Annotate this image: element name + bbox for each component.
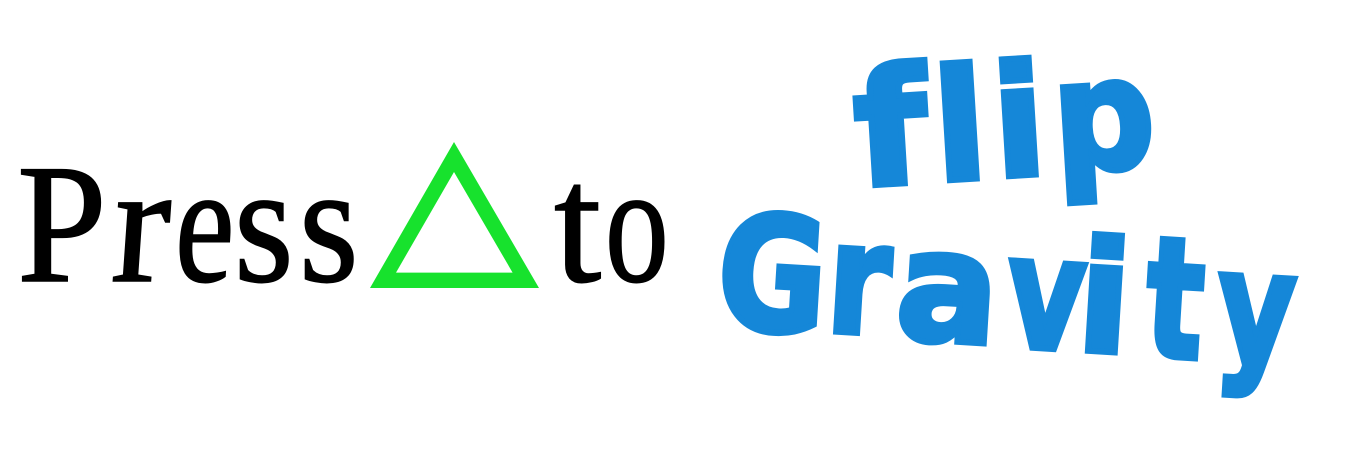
text: Press: P <box>17 129 107 318</box>
heading: Gravity: a <box>892 195 1004 381</box>
heading: Flip: f <box>849 33 935 224</box>
heading: Gravity: t <box>1141 202 1210 399</box>
heading: Gravity: G <box>713 181 832 372</box>
text: to: t <box>554 130 601 318</box>
heading: Gravity: y <box>1212 214 1301 402</box>
text: Press: s <box>299 130 359 318</box>
text: to <box>554 129 669 318</box>
heading: Flip <box>849 23 1159 224</box>
text: Press: e <box>171 131 240 319</box>
icon: green triangle button <box>370 142 539 288</box>
heading: Gravity <box>713 181 1301 402</box>
heading: Gravity: v <box>1002 200 1091 388</box>
text: Press: r <box>107 129 177 318</box>
text: Press <box>17 129 359 319</box>
heading: Flip: i <box>987 32 1051 214</box>
text: Press: s <box>234 130 294 318</box>
heading: Gravity: i <box>1073 208 1136 390</box>
text: to: o <box>605 129 669 318</box>
heading: Gravity: r <box>823 189 896 372</box>
heading: Flip: l <box>928 36 992 218</box>
heading: Flip: p <box>1047 23 1159 208</box>
